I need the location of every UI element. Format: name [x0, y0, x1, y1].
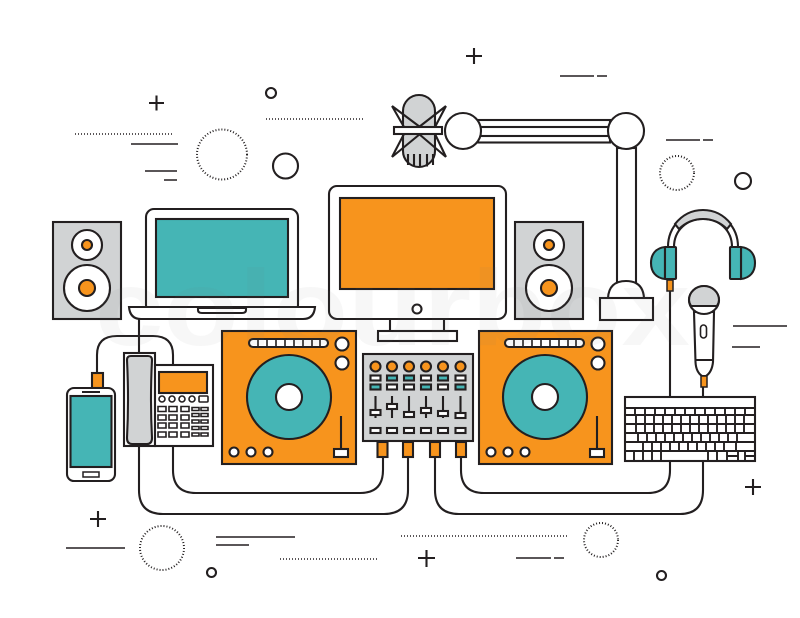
microphone head [392, 95, 446, 167]
headphones [651, 210, 755, 291]
keyboard [625, 397, 755, 461]
mixer [363, 354, 473, 457]
decorative small circles [207, 88, 751, 580]
laptop [129, 209, 315, 319]
decorative plus signs [90, 48, 761, 567]
desk phone [124, 353, 213, 446]
decorative solid dashes [66, 76, 787, 558]
smartphone [67, 373, 115, 481]
decorative dotted circles [140, 130, 694, 570]
turntable right [479, 331, 612, 464]
turntable left [222, 331, 356, 464]
speaker left [53, 222, 121, 319]
studio microphone on boom arm [392, 95, 653, 320]
monitor [329, 186, 506, 341]
decorative dotted lines [75, 119, 567, 559]
handheld microphone [689, 286, 719, 387]
boom arm [445, 113, 653, 320]
phone keypad [158, 396, 208, 437]
cables [97, 291, 703, 514]
speaker right [515, 222, 583, 319]
watermark: colourbox [95, 247, 690, 368]
